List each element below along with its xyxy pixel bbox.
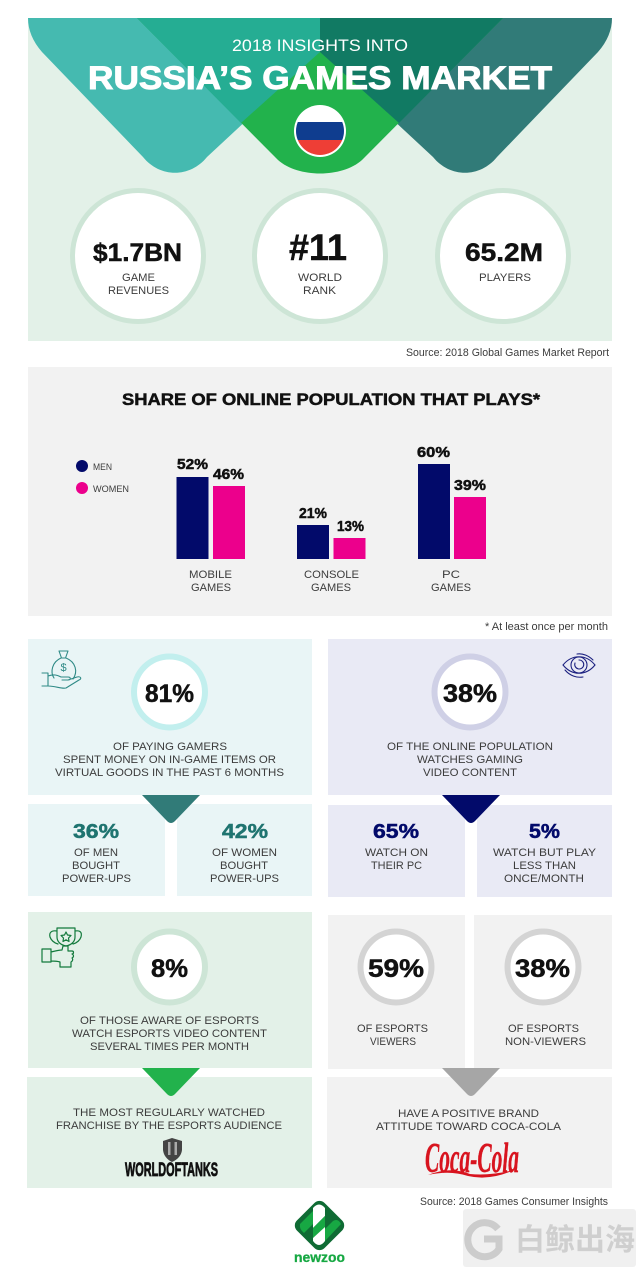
- title: RUSSIA’S GAMES MARKET: [88, 60, 552, 96]
- description: WATCHES GAMING: [417, 754, 523, 766]
- description: VIRTUAL GOODS IN THE PAST 6 MONTHS: [55, 767, 284, 779]
- arrow: video viewers: [442, 795, 500, 823]
- bar group: mobile games: 52%: [177, 457, 208, 473]
- bar group: mobile games: MOBILE: [189, 569, 232, 581]
- description: WATCH ESPORTS VIDEO CONTENT: [72, 1028, 267, 1040]
- arrow: esports viewers: [142, 1068, 200, 1096]
- panel: women bought power-ups: POWER-UPS: [210, 873, 279, 885]
- icon: money bag over hand: $: [60, 662, 67, 674]
- legend: [76, 460, 129, 495]
- stat: players: [438, 190, 568, 322]
- arrow: coca-cola: [442, 1068, 500, 1096]
- bar group: console games: 21%: [299, 506, 327, 522]
- stat: world rank: WORLD: [298, 272, 342, 284]
- bar group: console games: 13%: [337, 519, 364, 535]
- logo: newzoo: [292, 1198, 347, 1265]
- logo: Coca-Cola: Coca-Cola: [425, 1136, 519, 1182]
- stat ring: 81%: 81%: [145, 680, 194, 708]
- description: [387, 741, 553, 779]
- bar group: console games: CONSOLE: [304, 569, 359, 581]
- bar group: PC games: 39%: [454, 478, 486, 494]
- panel: esports non-viewers stat: 38%: [515, 955, 570, 983]
- stat: game revenues: $1.7BN: [93, 239, 182, 267]
- panel: men bought power-ups: 36%: [73, 821, 119, 843]
- stat ring: 81%: [134, 656, 205, 728]
- arrow: paying gamers: [142, 795, 200, 823]
- bar group: mobile games: 46%: [213, 467, 244, 483]
- stat: world rank: RANK: [303, 285, 337, 297]
- watermark: 白鲸出海: [515, 1215, 635, 1259]
- chart heading: SHARE OF ONLINE POPULATION THAT PLAYS*: [122, 391, 541, 409]
- stat: players: 65.2M: [465, 239, 543, 267]
- panel: paying gamers: [28, 639, 312, 795]
- legend: WOMEN: [93, 484, 129, 495]
- panel: watch on PC: [328, 805, 465, 897]
- panel: watch on PC: 65%: [373, 821, 419, 843]
- panel: Coca-Cola: HAVE A POSITIVE BRAND: [398, 1108, 539, 1120]
- description: OF THE ONLINE POPULATION: [387, 741, 553, 753]
- stat: players: PLAYERS: [479, 272, 531, 284]
- logo: World of Tanks: [125, 1138, 218, 1181]
- stat: game revenues: [72, 190, 204, 322]
- logo: newzoo: newzoo: [294, 1249, 345, 1265]
- panel: esports non-viewers stat: [474, 915, 612, 1069]
- panel: esports non-viewers stat: OF ESPORTS: [508, 1023, 579, 1035]
- stat ring: 8%: [134, 932, 205, 1002]
- panel: esports viewers stat: OF ESPORTS: [357, 1023, 428, 1035]
- stat ring: 38%: [434, 656, 506, 728]
- bar group: console games: [297, 506, 366, 594]
- description: SPENT MONEY ON IN-GAME ITEMS OR: [63, 754, 276, 766]
- stat: world rank: #11: [289, 227, 347, 268]
- footnote: * At least once per month: [485, 621, 608, 633]
- panel: esports viewers stat: [328, 915, 465, 1069]
- description: [55, 741, 284, 779]
- bar group: mobile games: GAMES: [191, 582, 231, 594]
- panel: men bought power-ups: [28, 804, 165, 896]
- icon: money bag over hand: [42, 651, 81, 688]
- bar group: PC games: GAMES: [431, 582, 471, 594]
- panel: men bought power-ups: BOUGHT: [72, 860, 120, 872]
- description: OF THOSE AWARE OF ESPORTS: [80, 1015, 259, 1027]
- bar group: PC games: 60%: [417, 445, 450, 461]
- bar group: mobile games: [176, 457, 245, 594]
- panel: women bought power-ups: [177, 804, 312, 896]
- panel: watch on PC: THEIR PC: [371, 860, 422, 872]
- panel: video viewers: [328, 639, 612, 795]
- panel: watch but play less: LESS THAN: [513, 860, 576, 872]
- panel: share of online population: [28, 367, 612, 616]
- description: VIDEO CONTENT: [423, 767, 517, 779]
- panel: World of Tanks: THE MOST REGULARLY WATCHED: [73, 1107, 265, 1119]
- icon: trophy in hand: [42, 928, 81, 967]
- bar group: PC games: PC: [442, 569, 460, 581]
- logo: Coca-Cola: [425, 1136, 519, 1182]
- panel: esports viewers stat: VIEWERS: [370, 1036, 416, 1048]
- panel: Coca-Cola: [327, 1077, 612, 1188]
- icon: Russian flag: [294, 105, 346, 158]
- stat ring: 38%: 38%: [443, 680, 497, 708]
- legend: MEN: [93, 462, 112, 473]
- panel: esports viewers stat: 59%: [368, 955, 424, 983]
- stat ring: 8%: 8%: [151, 955, 188, 983]
- panel: header: [28, 18, 612, 341]
- source note: Source: 2018 Games Consumer Insights: [420, 1196, 608, 1208]
- panel: esports non-viewers stat: NON-VIEWERS: [505, 1036, 586, 1048]
- panel: watch but play less: WATCH BUT PLAY: [493, 847, 597, 859]
- stat: game revenues: REVENUES: [108, 285, 169, 297]
- panel: World of Tanks: [27, 1077, 312, 1188]
- watermark: [463, 1209, 636, 1267]
- description: OF PAYING GAMERS: [113, 741, 227, 753]
- panel: esports viewers: [28, 912, 312, 1068]
- bar group: PC games: [417, 445, 486, 594]
- panel: watch on PC: WATCH ON: [365, 847, 428, 859]
- panel: men bought power-ups: POWER-UPS: [62, 873, 131, 885]
- panel: watch but play less: [477, 805, 612, 897]
- panel: Coca-Cola: ATTITUDE TOWARD COCA-COLA: [376, 1121, 562, 1133]
- source note: Source: 2018 Global Games Market Report: [406, 347, 609, 359]
- logo: World of Tanks: WORLDOFTANKS: [125, 1160, 218, 1181]
- panel: women bought power-ups: OF WOMEN: [212, 847, 277, 859]
- panel: women bought power-ups: 42%: [222, 821, 268, 843]
- panel: watch but play less: 5%: [529, 821, 560, 843]
- panel: women bought power-ups: BOUGHT: [220, 860, 268, 872]
- panel: men bought power-ups: OF MEN: [74, 847, 118, 859]
- stat: world rank: [254, 190, 386, 322]
- description: [72, 1015, 267, 1053]
- stat: game revenues: GAME: [122, 272, 155, 284]
- panel: World of Tanks: FRANCHISE BY THE ESPORTS AUDIENCE: [56, 1120, 282, 1132]
- panel: watch but play less: ONCE/MONTH: [504, 873, 584, 885]
- bar group: console games: GAMES: [311, 582, 351, 594]
- description: SEVERAL TIMES PER MONTH: [90, 1041, 249, 1053]
- icon: eye: [563, 654, 595, 677]
- subtitle: 2018 INSIGHTS INTO: [232, 37, 408, 55]
